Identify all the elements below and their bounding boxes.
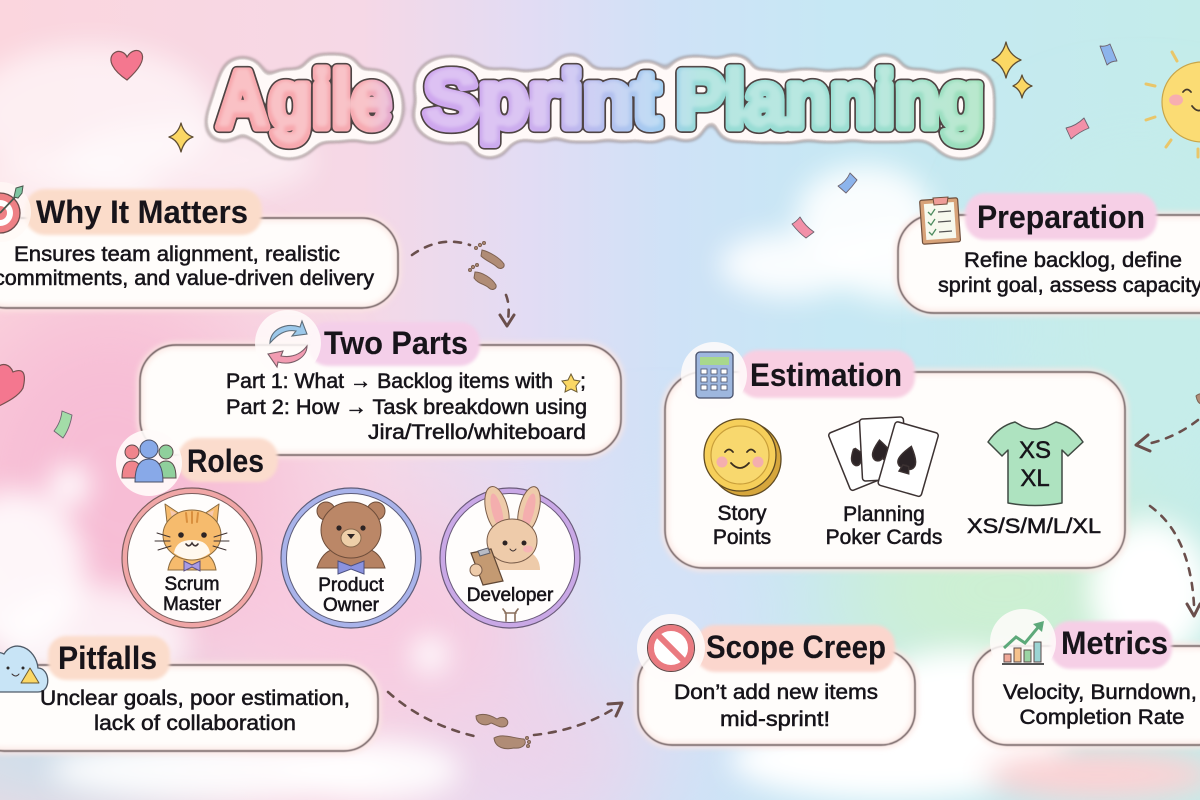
icon: poker cards (828, 417, 939, 497)
heading pill (965, 193, 1157, 240)
heading pill (25, 189, 262, 235)
heading pill (1050, 621, 1172, 669)
icon: cloud with warning (0, 646, 48, 692)
footprints (468, 242, 504, 289)
role: developer (440, 484, 580, 628)
icon: tiny critter (503, 609, 518, 621)
decoration: hearts (0, 50, 143, 406)
decoration: sparkles (169, 42, 1032, 152)
body text: Ensures team alignment, realistic (14, 242, 340, 266)
icon: cat (155, 504, 229, 571)
icon: sun (1146, 52, 1200, 157)
panel: two parts (140, 310, 621, 455)
icon: t-shirt: XS (1019, 437, 1051, 464)
panel: roles (116, 430, 580, 628)
panel: why it matters (0, 182, 398, 308)
body text: Unclear goals, poor estimation, (40, 686, 350, 710)
footprints (476, 714, 530, 749)
icon: bear (317, 502, 385, 574)
heading: Scope Creep (706, 629, 886, 665)
heading: Roles (187, 443, 264, 479)
heading: Preparation (977, 199, 1145, 235)
body text: Refine backlog, define (964, 248, 1182, 272)
icon: target with arrow (0, 182, 31, 242)
icon: t-shirt: XL (1020, 465, 1050, 492)
panel: scope creep (637, 614, 915, 745)
icon: coin (704, 419, 781, 496)
label: planning poker cards: Poker Cards (826, 526, 942, 549)
body text: lack of collaboration (94, 711, 296, 735)
heading: Pitfalls (58, 640, 157, 676)
label: planning poker cards: Planning (843, 503, 925, 526)
role: scrum master (122, 488, 262, 628)
panel: estimation (665, 342, 1125, 568)
arrow: why it matters to two parts (412, 242, 514, 326)
icon: rabbit with clipboard (470, 484, 545, 585)
icon: star (562, 374, 580, 392)
panel: preparation (898, 193, 1200, 313)
panel: pitfalls (0, 636, 378, 751)
heading pill (695, 625, 895, 672)
title: Agile (217, 55, 391, 144)
panel: metrics (973, 609, 1200, 745)
body text: sprint goal, assess capacity (938, 273, 1200, 297)
icon: t-shirt (988, 422, 1083, 506)
role: product owner (281, 488, 421, 628)
title (217, 55, 984, 144)
arrow: estimation to metrics (1150, 506, 1200, 616)
icon: people (116, 430, 182, 496)
title: Planning (676, 55, 984, 144)
label: story points: Story (717, 502, 767, 525)
icon: no sign (637, 614, 705, 682)
icon: calculator (681, 342, 747, 408)
label: Product (318, 575, 384, 596)
body text: Velocity, Burndown, (1003, 680, 1197, 704)
title: Sprint (424, 55, 660, 144)
heading: Why It Matters (36, 194, 248, 230)
body text: Don’t add new items (674, 680, 878, 704)
body text: ; (580, 369, 586, 393)
icon: refresh arrows (255, 310, 321, 376)
label: story points: Points (713, 526, 771, 549)
heading pill (308, 322, 480, 366)
body text: Completion Rate (1020, 705, 1184, 729)
heading pill (738, 350, 915, 398)
icon: growth chart (990, 609, 1056, 675)
icon: clipboard (920, 197, 961, 244)
body text: commitments, and value-driven delivery (0, 266, 374, 290)
label: Scrum (165, 574, 219, 595)
label: Owner (323, 595, 380, 616)
heading: Metrics (1061, 625, 1168, 661)
body text: mid-sprint! (720, 707, 830, 731)
body text: Jira/Trello/whiteboard (368, 420, 586, 444)
label: t-shirt sizes: XS/S/M/L/XL (967, 515, 1101, 538)
arrow: right into estimation (1136, 394, 1200, 451)
heading: Estimation (750, 357, 902, 393)
body text: Part 1: What → Backlog items with (226, 369, 553, 393)
body text: Part 2: How → Task breakdown using (226, 395, 587, 419)
label: Master (163, 594, 222, 615)
heading: Two Parts (324, 325, 468, 361)
heading pill (178, 438, 278, 482)
arrow: pitfalls to scope creep (388, 692, 622, 749)
decoration: confetti (54, 44, 1117, 438)
heading pill (48, 636, 170, 680)
label: Developer (467, 585, 554, 606)
